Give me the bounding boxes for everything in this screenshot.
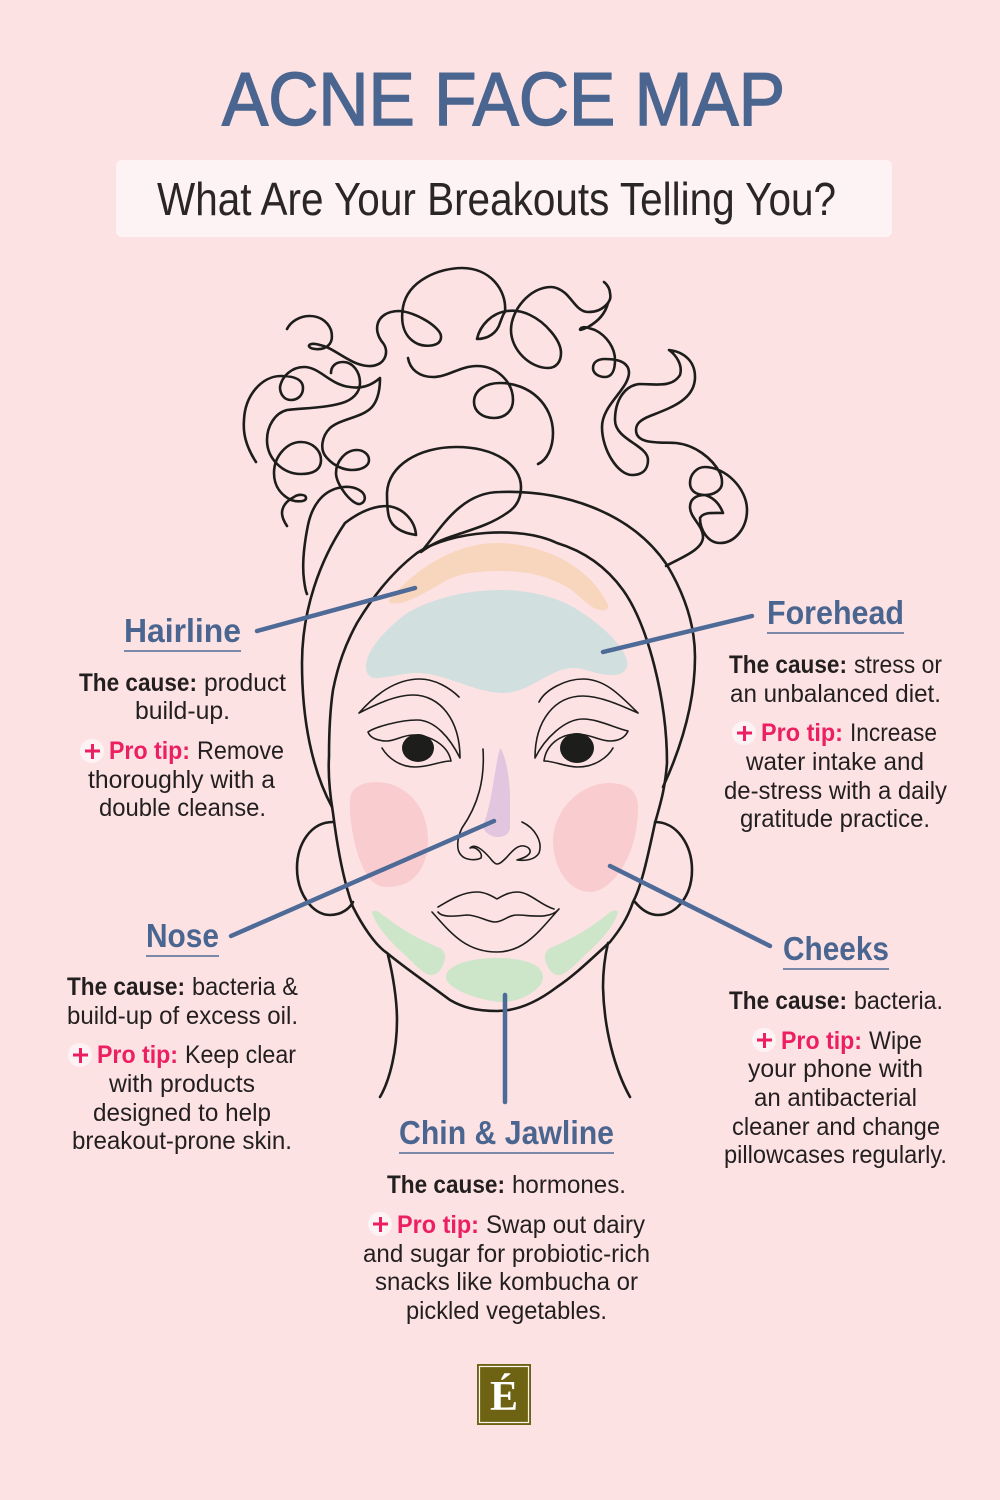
zone: left jaw (372, 911, 445, 975)
panel: hairline (79, 612, 286, 822)
zone: chin (446, 958, 543, 1002)
pro tip: cheeks: Pro tip: (781, 1027, 862, 1055)
pro tip: hairline: Pro tip: (109, 737, 190, 765)
pro tip: forehead: Increase (850, 719, 937, 747)
cause text: forehead: stress or (854, 651, 942, 679)
pro tip: chin: Swap out dairy (486, 1211, 645, 1239)
cause text: chin: hormones. (512, 1171, 626, 1199)
logo: É (490, 1373, 518, 1420)
pro tip: forehead: gratitude practice. (740, 805, 930, 833)
cause text: chin: The cause: (387, 1171, 505, 1199)
logo (477, 1364, 531, 1425)
panel: forehead (724, 594, 947, 833)
pro tip: forehead: de-stress with a daily (724, 777, 947, 805)
pro tip: cheeks (724, 1027, 947, 1169)
nose outline (458, 749, 540, 864)
pro tip: hairline: thoroughly with a (88, 766, 275, 794)
pro tip: nose: Keep clear (185, 1041, 296, 1069)
pro tip: hairline: double cleanse. (99, 794, 266, 822)
cause text: cheeks (729, 987, 943, 1015)
pro tip: forehead: Pro tip: (761, 719, 843, 747)
face outline (329, 532, 667, 1011)
pro tip: cheeks: an antibacterial (754, 1084, 917, 1112)
cause text: hairline (79, 669, 286, 725)
pointer: hairline (257, 588, 415, 631)
pro tip: chin: and sugar for probiotic-rich (363, 1240, 650, 1268)
cause text: nose: build-up of excess oil. (67, 1002, 298, 1030)
zone: right jaw (545, 910, 618, 975)
cause text: hairline: product (204, 669, 286, 697)
cause text: forehead: The cause: (729, 651, 847, 679)
cause text: hairline: build-up. (135, 697, 230, 725)
pro tip: nose (68, 1041, 296, 1155)
zone: nose (483, 748, 510, 837)
pro tip: nose: Pro tip: (97, 1041, 178, 1069)
heading: cheeks: Cheeks (783, 930, 889, 967)
panel: nose (67, 917, 298, 1155)
pro tip: chin (363, 1211, 650, 1325)
pro tip: nose: with products (108, 1070, 255, 1098)
pro tip: forehead (724, 719, 947, 833)
cause text: hairline: The cause: (79, 669, 197, 697)
cause text: cheeks: bacteria. (854, 987, 943, 1015)
left eye (359, 679, 460, 767)
neck (380, 943, 630, 1097)
right ear (635, 822, 692, 915)
cause text: nose (67, 973, 298, 1030)
panel: cheeks (724, 930, 947, 1169)
heading: hairline: Hairline (124, 612, 241, 649)
pro tip: chin: Pro tip: (397, 1211, 479, 1239)
heading: forehead: Forehead (767, 594, 904, 631)
title: ACNE FACE MAP (222, 57, 785, 141)
heading: chin and jawline: Chin & Jawline (399, 1114, 614, 1151)
cause text: chin (387, 1171, 626, 1199)
pro tip: forehead: water intake and (745, 748, 924, 776)
heading: nose: Nose (146, 917, 219, 954)
pro tip: cheeks: pillowcases regularly. (724, 1141, 947, 1169)
pointer: cheeks (610, 866, 770, 946)
cause text: cheeks: The cause: (729, 987, 847, 1015)
hair (244, 268, 747, 594)
subtitle banner (116, 160, 892, 237)
face illustration (244, 268, 747, 1097)
cause text: forehead: an unbalanced diet. (730, 680, 941, 708)
left ear (297, 822, 353, 915)
panel: chin and jawline (363, 1114, 650, 1325)
pro tip: hairline: Remove (197, 737, 284, 765)
zone: forehead (366, 590, 627, 693)
pro tip: nose: breakout-prone skin. (72, 1127, 292, 1155)
pro tip: cheeks: cleaner and change (732, 1113, 940, 1141)
pointer: chin (503, 995, 507, 1102)
pro tip: cheeks: your phone with (748, 1055, 923, 1083)
pro tip: nose: designed to help (93, 1099, 271, 1127)
pro tip: chin: pickled vegetables. (406, 1297, 607, 1325)
zone: hairline (389, 543, 608, 610)
right eye (535, 679, 638, 767)
lips (432, 892, 559, 952)
head and bun outline (302, 447, 695, 807)
pro tip: chin: snacks like kombucha or (375, 1268, 638, 1296)
pro tip: cheeks: Wipe (869, 1027, 922, 1055)
zone: left cheek (350, 782, 428, 887)
cause text: nose: bacteria & (192, 973, 298, 1001)
cause text: forehead (729, 651, 942, 708)
zone: right cheek (553, 783, 638, 892)
subtitle banner: What Are Your Breakouts Telling You? (157, 173, 836, 225)
cause text: nose: The cause: (67, 973, 185, 1001)
pro tip: hairline (80, 737, 284, 822)
pointer: forehead (603, 616, 752, 652)
pointer: nose (231, 821, 494, 936)
